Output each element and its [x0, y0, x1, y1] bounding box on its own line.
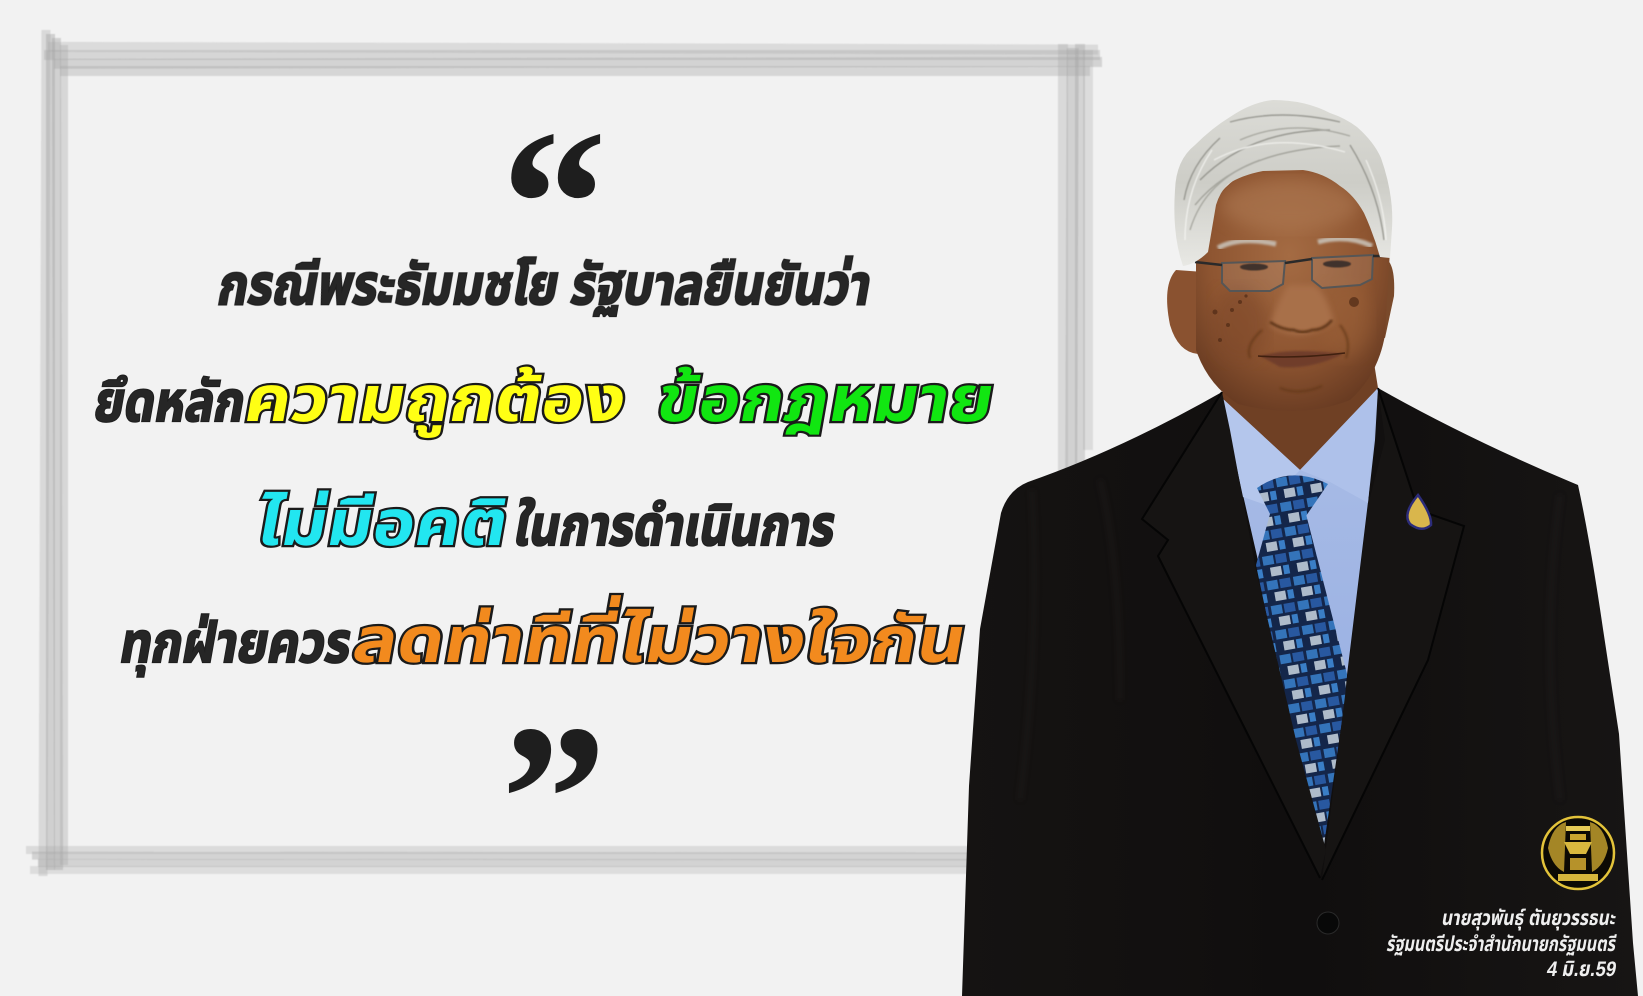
- quote line 4 lead-in: ทุกฝ่ายควร: [115, 611, 357, 677]
- face: [1196, 160, 1390, 411]
- left ear: [1167, 270, 1204, 354]
- eyes: [1240, 264, 1268, 270]
- nose: [1270, 285, 1334, 334]
- tie: [1256, 475, 1347, 852]
- seal emblem: [1542, 817, 1614, 889]
- right lapel: [1322, 388, 1464, 880]
- jacket button: [1317, 912, 1339, 934]
- right ear: [1372, 258, 1394, 338]
- eyebrows: [1218, 241, 1276, 248]
- cheek freckles: [1212, 294, 1359, 342]
- caption: [1385, 907, 1618, 981]
- caption date: 4 มิ.ย.59: [1545, 958, 1618, 981]
- highlight: cyan words: ไม่มีอคติ: [252, 487, 514, 559]
- quote line 3 remainder: ในการดำเนินการ: [510, 494, 841, 557]
- cheek shading: [1319, 282, 1371, 358]
- suit body: [962, 388, 1638, 996]
- highlight: orange words: ลดท่าทีที่ไม่วางใจกัน: [348, 595, 974, 676]
- neck: [1222, 350, 1378, 470]
- smile lines: [1249, 325, 1348, 392]
- highlight: green words: ข้อกฎหมาย: [652, 363, 1000, 435]
- highlight: yellow words: ความถูกต้อง: [239, 363, 632, 438]
- seal ornament: [1548, 822, 1608, 881]
- quote line 2 lead-in: ยึดหลัก: [90, 370, 251, 433]
- lapel pin: [1407, 495, 1431, 529]
- icon: opening quotation mark: “: [501, 86, 607, 321]
- panel: brushed grey frame: [26, 30, 1102, 876]
- icon: closing quotation mark: ”: [501, 681, 607, 916]
- glasses: [1195, 255, 1386, 291]
- quote text: [90, 253, 1000, 677]
- mouth: [1260, 351, 1343, 367]
- hair: [1174, 100, 1392, 266]
- shirt: [1222, 388, 1378, 850]
- quote line 1: กรณีพระธัมมชโย รัฐบาลยืนยันว่า: [214, 253, 877, 316]
- forehead highlight: [1220, 179, 1360, 231]
- left lapel: [1142, 392, 1326, 878]
- shirt collar: [1222, 398, 1300, 505]
- suit creases: [1020, 480, 1560, 800]
- portrait photo illustration: [962, 100, 1638, 996]
- hair strands: [1184, 115, 1386, 240]
